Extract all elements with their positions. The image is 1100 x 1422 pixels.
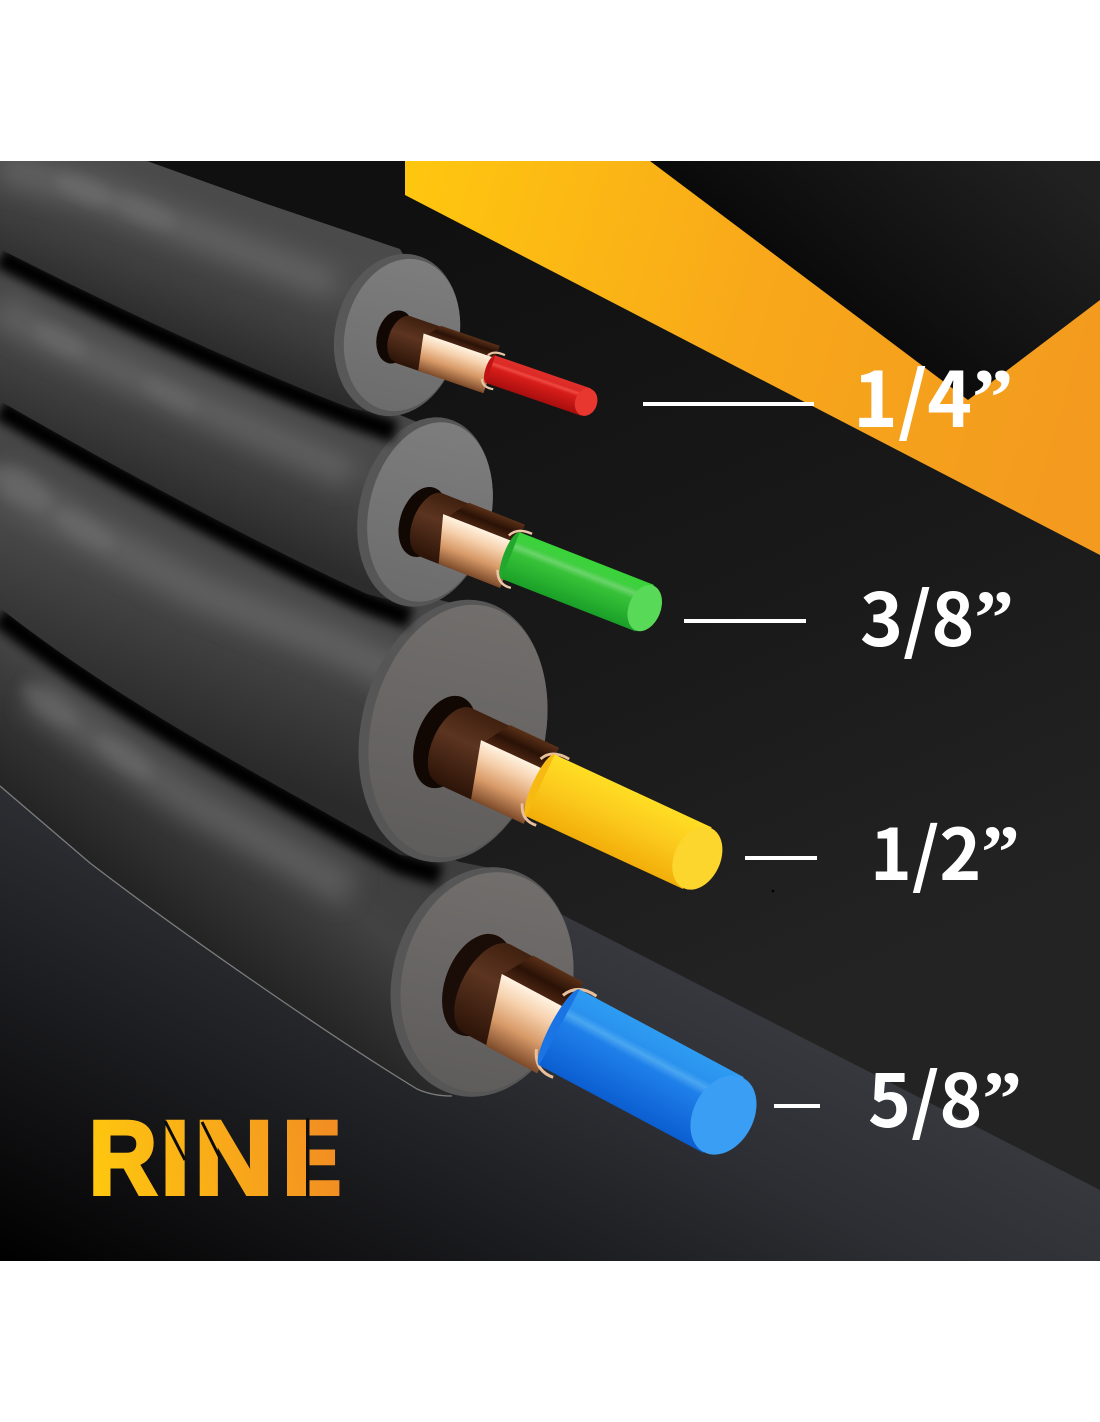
cable 3: yellow 1/2 inch bbox=[0, 395, 736, 906]
label 3/8: ” bbox=[974, 575, 1014, 662]
cable 1: red 1/4 inch bbox=[0, 161, 605, 432]
label 5/8: ” bbox=[982, 1056, 1022, 1143]
leader line 3/8 bbox=[684, 619, 806, 623]
label 1/4: 1/4 bbox=[853, 339, 972, 449]
background panel bbox=[0, 161, 1100, 1261]
conductor: green bbox=[410, 492, 662, 632]
logo: RINE bbox=[89, 1099, 341, 1217]
cable 2: green 3/8 inch bbox=[0, 240, 672, 646]
label 1/2: ” bbox=[981, 810, 1020, 895]
logo: RINE: E bbox=[283, 1100, 341, 1217]
leader line 1/4 bbox=[643, 402, 814, 406]
leader line 1/2 bbox=[745, 856, 817, 860]
label 1/2: 1/2 bbox=[870, 799, 981, 901]
label 3/8: 3/8 bbox=[860, 562, 974, 668]
conductor: red bbox=[387, 316, 598, 416]
top-right dark area bbox=[696, 161, 1100, 400]
orange diagonal banner bbox=[405, 161, 1100, 555]
label 1/4: ” bbox=[972, 352, 1013, 443]
cable 4: blue 5/8 inch bbox=[0, 600, 774, 1174]
lighter diagonal floor band bbox=[0, 787, 1100, 1261]
logo: RINE: N bbox=[194, 1099, 273, 1217]
conductor: yellow bbox=[428, 707, 722, 890]
conductor: blue bbox=[454, 943, 756, 1155]
label 5/8: 5/8 bbox=[868, 1043, 982, 1149]
leader line 5/8 bbox=[774, 1104, 820, 1108]
logo: RINE: R bbox=[89, 1100, 157, 1217]
logo: RINE: I bbox=[160, 1100, 190, 1217]
speck bbox=[772, 890, 774, 892]
